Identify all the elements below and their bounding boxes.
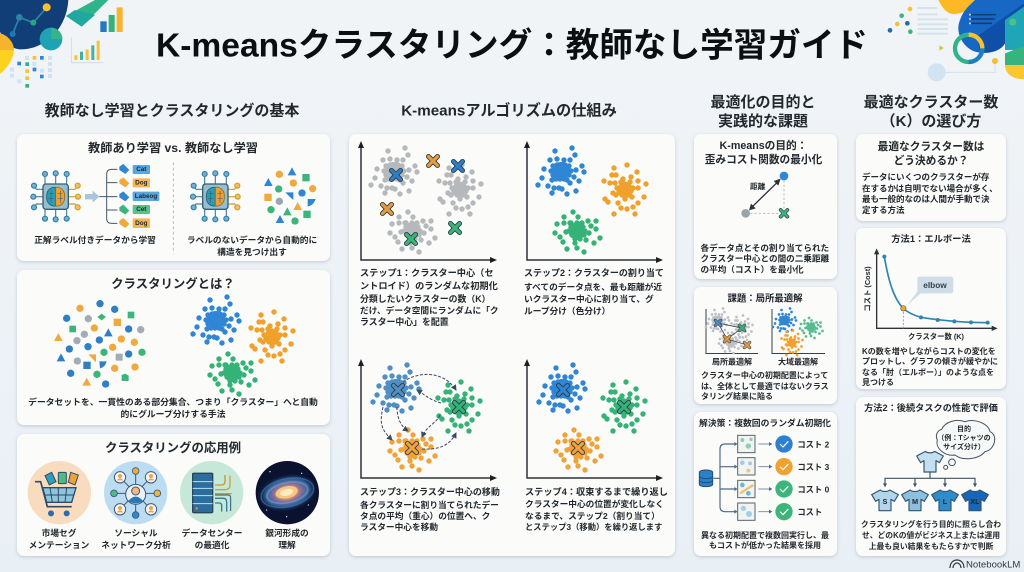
panel: k-means algorithm xyxy=(349,134,675,556)
diagram: t-shirt sizes: S xyxy=(883,497,888,506)
heading: 方法1：エルボー法 xyxy=(891,233,971,244)
text: step 3: 各クラスターに割り当てられたデー xyxy=(360,499,499,510)
description: もコストが低かった結果を採用 xyxy=(709,540,821,550)
text: step 1: ントロイド）のランダムな初期化 xyxy=(360,280,498,291)
icon: shopping cart xyxy=(28,461,91,524)
chart: step 1 xyxy=(358,141,497,263)
text: step 3: ラスター中心を移動 xyxy=(360,521,438,532)
chart: elbow curve: elbow xyxy=(923,280,947,290)
panel: solution xyxy=(694,412,837,556)
diagram: t-shirt sizes: L xyxy=(943,497,948,506)
diagram: distance: 距離 xyxy=(750,181,766,191)
heading: 最適なクラスター数は xyxy=(878,140,985,153)
icon: data center xyxy=(180,461,243,524)
chart: elbow curve: コスト (Cost) xyxy=(863,266,872,312)
label: social network: ソーシャル xyxy=(114,528,158,538)
text: step 4: クラスター中心の位置が変化しなく xyxy=(525,498,664,509)
icons: supervised and unsupervised diagrams: Labeog xyxy=(135,193,157,200)
text: step 2: ステップ2：クラスターの割り当て xyxy=(524,267,664,278)
description: 各データ点とその割り当てられた xyxy=(700,242,829,253)
label: galaxy: 銀河形成の xyxy=(265,527,309,538)
column heading: choosing K: （K）の選び方 xyxy=(881,112,981,130)
heading: クラスタリングとは？ xyxy=(111,276,235,291)
icon: social network xyxy=(104,461,167,524)
chart: elbow curve xyxy=(863,248,998,341)
decoration: top-left graphics xyxy=(0,0,123,88)
description: クラスター中心との間の二乗距離 xyxy=(700,252,830,264)
description: 上最も良い結果をもたらすかで判断 xyxy=(869,540,993,550)
label: social network: ネットワーク分析 xyxy=(101,539,171,550)
scatter: mixed unlabeled data xyxy=(54,300,146,388)
column heading: algorithm: K-meansアルゴリズムの仕組み xyxy=(401,102,617,120)
chart: global optimum xyxy=(772,307,825,356)
icons: supervised and unsupervised diagrams: Dog xyxy=(135,220,148,227)
label: global: 大域最適解 xyxy=(778,356,818,366)
description: 見つける xyxy=(862,378,894,386)
panel: applications xyxy=(17,434,330,556)
text: step 1: ステップ1：クラスター中心（セ xyxy=(360,267,494,278)
diagram: t-shirt sizes: サイズ分け） xyxy=(943,442,985,451)
label: market segmentation: 市場セグ xyxy=(42,527,77,538)
description: せ、どのKの値がビジネス上または運用 xyxy=(862,530,1000,540)
heading: K-meansの目的： xyxy=(720,139,807,152)
label: market segmentation: メンテーション xyxy=(29,540,90,550)
description: クラスタリングを行う目的に照らし合わ xyxy=(861,518,1001,528)
column heading: choosing K: 最適なクラスター数 xyxy=(864,92,998,110)
chart: step 2 xyxy=(524,141,663,263)
description: Kの数を増やしながらコストの変化を xyxy=(862,346,996,356)
description: なる「肘（エルボー）」のような点を xyxy=(862,366,994,376)
panel: downstream task xyxy=(856,397,1006,556)
diagram: multiple runs xyxy=(699,435,830,520)
text: step 1: ラスター中心」を配置 xyxy=(360,316,449,327)
label: galaxy: 理解 xyxy=(278,539,296,550)
icons: supervised and unsupervised diagrams: Cet xyxy=(136,206,147,213)
caption: supervised: 正解ラベル付きデータから学習 xyxy=(34,234,156,245)
chart: local optimum xyxy=(705,307,758,354)
description: の平均（コスト）を最小化 xyxy=(700,264,804,274)
text: step 3: ステップ3：クラスター中心の移動 xyxy=(360,486,500,497)
text: step 4: なるまで、ステップ2（割り当て） xyxy=(525,510,660,521)
text: step 1: 分類したいクラスターの数（K） xyxy=(360,293,490,304)
label: data center: の最適化 xyxy=(195,539,230,550)
heading: クラスタリングの応用例 xyxy=(105,440,241,455)
text: step 2: すべてのデータ点を、最も距離が近 xyxy=(524,281,662,292)
diagram: t-shirt sizes: （例：Tシャツの xyxy=(937,433,991,442)
text: step 1: だけ、データ空間にランダムに「ク xyxy=(360,304,499,316)
label: data center: データセンター xyxy=(182,527,242,538)
panel: elbow method xyxy=(856,228,1006,389)
description: データセットを、一貫性のある部分集合、つまり「クラスター」へと自動 xyxy=(28,396,318,407)
diagram: distance xyxy=(741,172,788,218)
column heading: basics: 教師なし学習とクラスタリングの基本 xyxy=(45,102,299,120)
column heading: optimization: 実践的な課題 xyxy=(718,112,808,130)
description: 的にグループ分けする手法 xyxy=(120,408,226,419)
icons: supervised and unsupervised diagrams: Cat xyxy=(136,166,147,173)
icons: supervised and unsupervised diagrams: Dog xyxy=(135,179,148,186)
icons row xyxy=(28,461,321,524)
heading: 歪みコスト関数の最小化 xyxy=(705,153,823,166)
logo: NotebookLM: NotebookLM xyxy=(966,560,1020,570)
panel: objective xyxy=(694,134,837,279)
clusters: grouped data xyxy=(190,294,296,397)
diagram: t-shirt sizes: XL xyxy=(970,497,980,506)
description: 異なる初期配置で複数回実行し、最 xyxy=(701,530,829,540)
chart: step 3 xyxy=(358,359,497,481)
chart: step 4 xyxy=(524,359,663,481)
description: 定する方法 xyxy=(862,205,905,215)
description: は、全体として最適ではないクラス xyxy=(701,380,829,390)
text: step 4: ステップ4：収束するまで繰り返し xyxy=(525,486,668,497)
panel: supervised vs unsupervised xyxy=(17,134,330,261)
diagram: multiple runs: コスト 2 xyxy=(797,439,830,449)
title: K-meansクラスタリング：教師なし学習ガイド xyxy=(156,26,868,64)
heading: 教師あり学習 vs. 教師なし学習 xyxy=(88,140,258,155)
description: タリング結果に陥る xyxy=(701,390,773,400)
heading: 課題：局所最適解 xyxy=(727,292,803,304)
diagram: multiple runs: コスト 0 xyxy=(797,484,830,494)
caption: unsupervised: 構造を見つけ出す xyxy=(217,246,287,257)
text: step 4: とステップ3（移動）を繰り返します xyxy=(525,522,662,532)
diagram: t-shirt sizes: 目的 xyxy=(957,424,971,433)
heading: 解決策：複数回のランダム初期化 xyxy=(699,417,831,428)
column heading: optimization: 最適化の目的と xyxy=(710,92,816,110)
label: local: 局所最適解 xyxy=(712,356,752,366)
decoration: top-right graphics xyxy=(888,0,1024,81)
diagram: t-shirt sizes xyxy=(872,420,995,511)
heading: 方法2：後続タスクの性能で評価 xyxy=(864,402,998,413)
panel: what is clustering xyxy=(17,270,330,425)
text: step 2: いクラスター中心に割り当て、グ xyxy=(524,293,654,304)
chart: elbow curve: クラスター数 (K) xyxy=(908,332,965,341)
description: 最も一般的なのは人間が手動で決 xyxy=(862,194,990,204)
text: step 2: ループ分け（色分け） xyxy=(524,305,610,316)
panel: local optimum xyxy=(694,287,837,404)
diagram: multiple runs: コスト 3 xyxy=(797,462,830,472)
diagram: t-shirt sizes: M xyxy=(912,497,918,506)
heading: どう決めるか？ xyxy=(894,154,968,167)
text: step 3: タ点の平均（重心）の位置へ、ク xyxy=(360,510,490,521)
icons: supervised and unsupervised diagrams xyxy=(31,162,316,253)
diagram: multiple runs: コスト xyxy=(797,507,822,517)
icon: galaxy xyxy=(253,461,321,524)
description: クラスター中心の初期配置によって xyxy=(701,370,828,380)
description: データにいくつのクラスターが存 xyxy=(862,172,990,182)
description: プロットし、グラフの傾きが緩やかに xyxy=(862,356,998,366)
caption: unsupervised: ラベルのないデータから自動的に xyxy=(187,234,317,245)
panel: how to decide k xyxy=(856,134,1006,221)
description: 在するかは自明でない場合が多く、 xyxy=(862,184,998,194)
